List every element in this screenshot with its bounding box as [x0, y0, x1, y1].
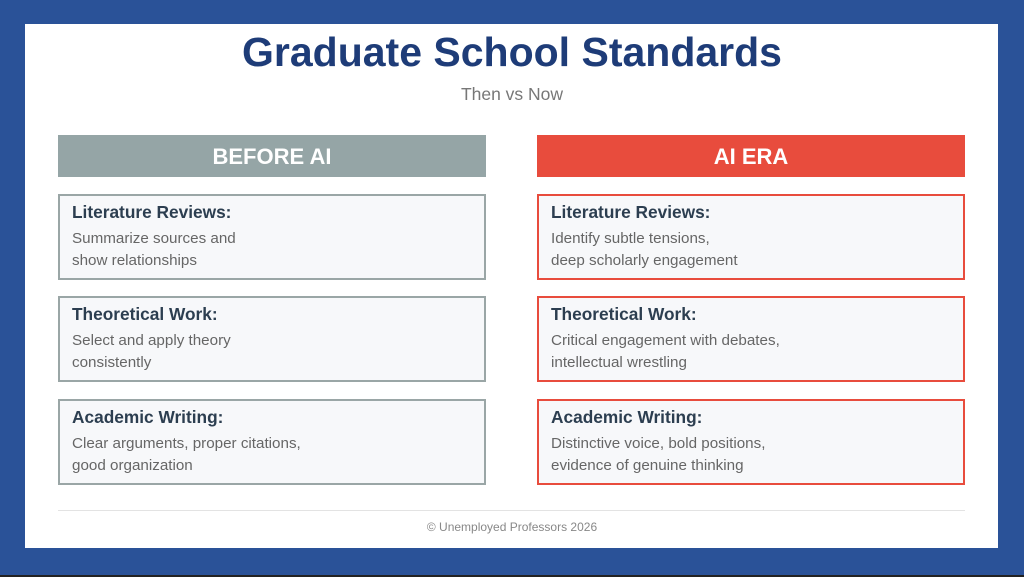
box: AI writing: Distinctive voice, bold positions,	[551, 435, 765, 452]
box: before literature: Literature Reviews:	[72, 202, 231, 222]
box: before literature: show relationships	[72, 252, 197, 268]
title: Graduate School Standards	[242, 29, 782, 75]
header: AI era	[537, 135, 965, 177]
box: before literature: Summarize sources and	[72, 230, 236, 247]
box: AI writing: evidence of genuine thinking	[551, 456, 744, 474]
box: AI literature	[537, 194, 965, 280]
box: AI literature: Identify subtle tensions,	[551, 230, 710, 247]
header: before AI	[58, 135, 486, 177]
box: before writing: Academic Writing:	[72, 407, 223, 427]
box: before writing: good organization	[72, 456, 193, 474]
box: AI theoretical: Critical engagement with debates,	[551, 332, 780, 349]
box: AI literature: Literature Reviews:	[551, 202, 710, 222]
box: before theoretical: Theoretical Work:	[72, 304, 218, 324]
box: AI literature: deep scholarly engagement	[551, 252, 738, 268]
box: before literature	[58, 194, 486, 280]
box: AI theoretical: intellectual wrestling	[551, 354, 687, 370]
box: AI theoretical: Theoretical Work:	[551, 304, 697, 324]
header: AI era: AI ERA	[714, 144, 788, 169]
box: before theoretical: consistently	[72, 354, 151, 370]
box: before theoretical	[58, 296, 486, 382]
footer: © Unemployed Professors 2026	[427, 520, 597, 534]
box: AI theoretical	[537, 296, 965, 382]
box: before theoretical: Select and apply theory	[72, 332, 231, 349]
box: before writing: Clear arguments, proper citations,	[72, 435, 301, 452]
header: before AI: BEFORE AI	[212, 144, 331, 169]
box: before writing	[58, 399, 486, 485]
box: AI writing: Academic Writing:	[551, 407, 702, 427]
box: AI writing	[537, 399, 965, 485]
subtitle: Then vs Now	[461, 84, 563, 104]
